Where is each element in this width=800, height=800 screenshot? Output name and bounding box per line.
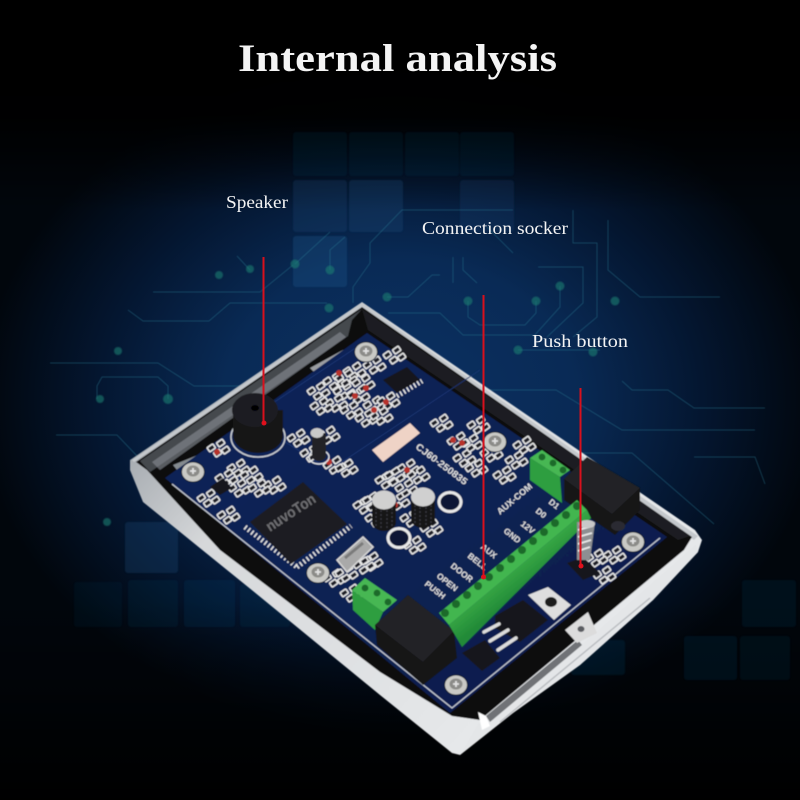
silkscreen text: AUX-COM <box>495 481 534 517</box>
background circuit traces <box>50 210 765 524</box>
buzzer speaker <box>231 393 285 457</box>
small SOIC chip <box>383 367 422 396</box>
label: Push button: Push button <box>532 331 628 351</box>
small green terminal left <box>352 578 397 630</box>
center relay <box>495 600 548 642</box>
silkscreen text: CJ60-250835 <box>413 442 470 488</box>
silkscreen text: PUSH <box>423 579 448 601</box>
silkscreen text: D0 <box>534 506 549 520</box>
small green terminal right <box>530 450 570 503</box>
background tile grid <box>74 132 796 680</box>
pointer: connection socket <box>481 295 486 580</box>
title: Internal analysis <box>238 37 557 80</box>
silkscreen text: GND <box>502 526 523 545</box>
push button with spring <box>567 520 600 580</box>
small IC <box>210 478 232 495</box>
red SMD parts <box>214 370 465 606</box>
mounting screws <box>182 342 644 695</box>
upright capacitor <box>309 428 329 464</box>
housing shell <box>130 302 702 755</box>
label sticker <box>372 423 420 462</box>
main chip <box>245 482 351 567</box>
silkscreen text <box>413 442 562 601</box>
electrolytic capacitors <box>372 488 435 531</box>
main chip: nuvoTon <box>263 491 319 535</box>
white ring pads <box>388 492 461 548</box>
relay right <box>564 457 640 535</box>
diode leads <box>484 624 516 650</box>
silkscreen text: 12V <box>519 519 537 536</box>
silkscreen text: D1 <box>547 497 562 511</box>
silkscreen text: DOOR <box>449 561 475 584</box>
silkscreen text: AUX <box>479 542 499 561</box>
silkscreen text: OPEN <box>435 571 460 593</box>
crystal <box>337 537 373 572</box>
relay left <box>375 595 457 685</box>
background circuit nodes <box>96 260 620 526</box>
silkscreen text: BELL <box>466 551 489 572</box>
label: Connection socker: Connection socker <box>422 218 568 238</box>
label: Speaker: Speaker <box>226 192 288 212</box>
pointer: push button <box>578 388 584 568</box>
pointer: speaker <box>262 257 266 426</box>
transistor with tab <box>528 587 571 620</box>
device: controller board in open housing <box>130 302 702 755</box>
small black transistor <box>462 640 500 671</box>
circuit board <box>165 333 667 713</box>
surface-mount pads <box>197 346 626 602</box>
long green terminal block <box>439 500 591 647</box>
